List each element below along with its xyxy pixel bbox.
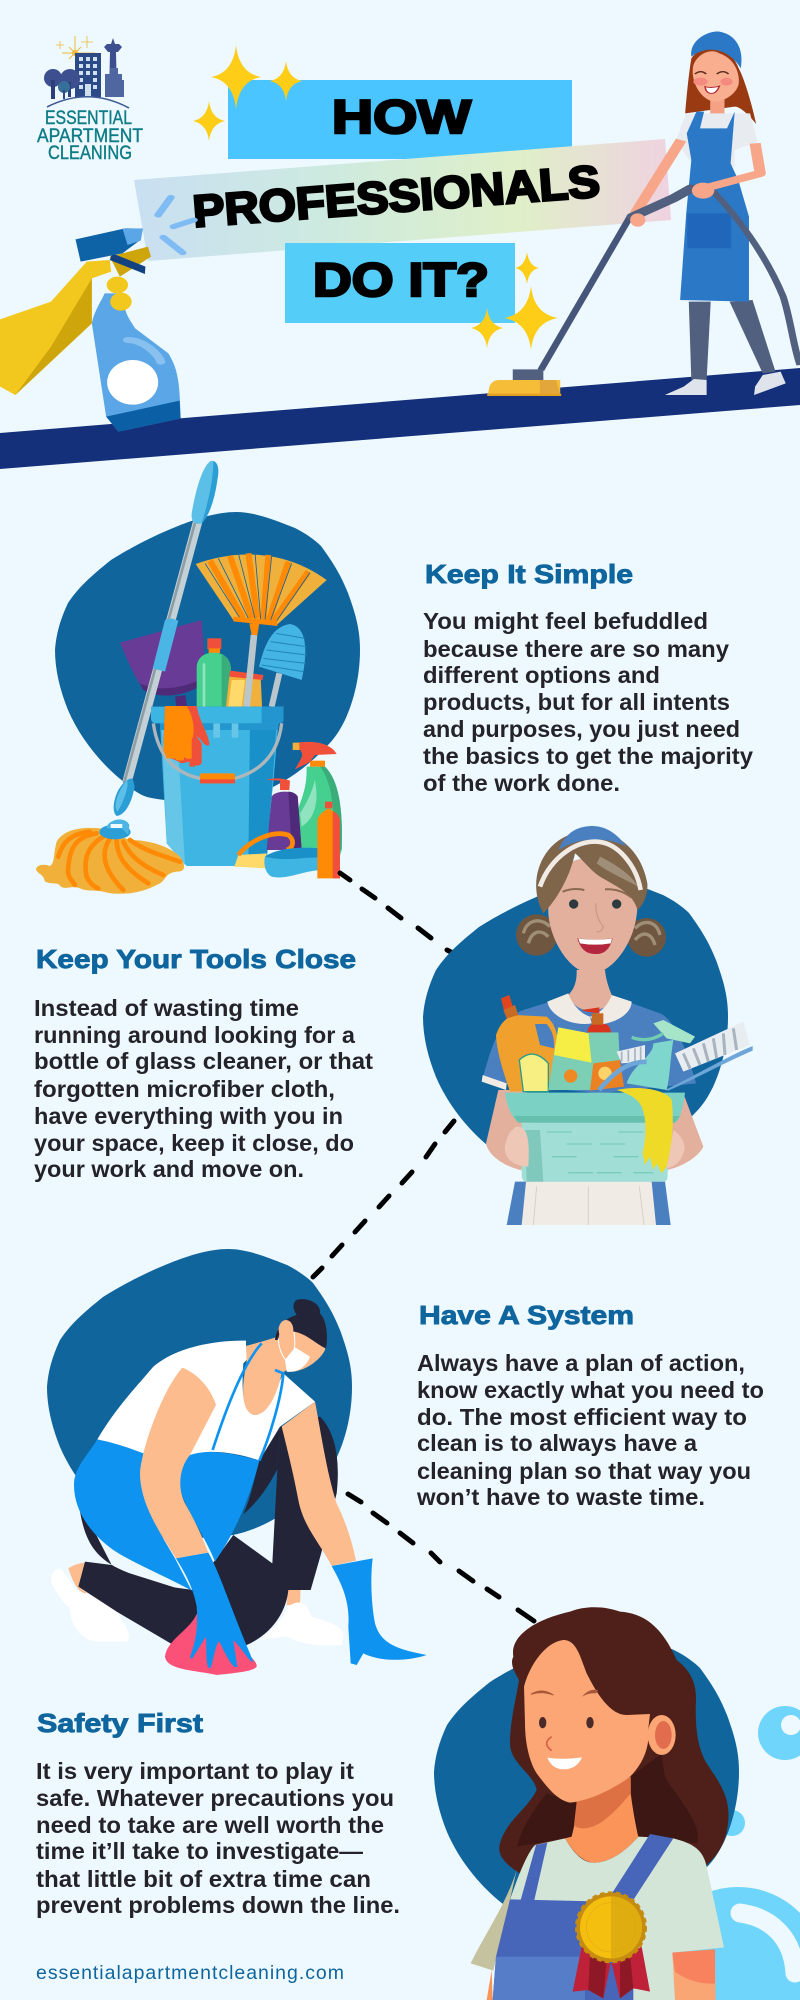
- illustration: cleaner with vacuum: [487, 31, 800, 396]
- floor band: [0, 368, 800, 469]
- title banner: [134, 80, 671, 323]
- text block: keep it simple: and purposes, you just need: [423, 716, 740, 742]
- text block: safety first: safe. Whatever precautions you: [36, 1785, 394, 1811]
- illustration: smiling woman with medal: [434, 1607, 739, 2000]
- text block: keep your tools close: running around looking for a: [34, 1022, 356, 1048]
- text block: keep it simple: Keep It Simple: [425, 559, 633, 589]
- text block: keep it simple: because there are so many: [423, 636, 729, 662]
- logo: Essential Apartment Cleaning: CLEANING: [48, 143, 132, 164]
- text block: keep it simple: of the work done.: [423, 770, 620, 796]
- text block: have a system: won’t have to waste time.: [416, 1484, 705, 1510]
- logo: Essential Apartment Cleaning: [37, 36, 143, 164]
- text block: keep it simple: products, but for all intents: [423, 689, 730, 715]
- text block: keep your tools close: Instead of wasting time: [34, 995, 299, 1021]
- illustration: maid with cleaning basket: [423, 826, 753, 1225]
- logo: Essential Apartment Cleaning: APARTMENT: [37, 126, 143, 147]
- text block: safety first: It is very important to play it: [36, 1758, 354, 1784]
- text block: safety first: that little bit of extra time can: [36, 1866, 371, 1892]
- text block: keep your tools close: have everything with you in: [34, 1103, 343, 1129]
- text block: have a system: Have A System: [419, 1300, 634, 1330]
- title banner: DO IT?: [313, 253, 489, 306]
- text block: have a system: Always have a plan of action,: [417, 1350, 745, 1376]
- text block: keep your tools close: forgotten microfiber cloth,: [34, 1076, 335, 1102]
- text block: keep your tools close: [34, 944, 373, 1182]
- text block: have a system: cleaning plan so that way you: [417, 1458, 751, 1484]
- website url: essentialapartmentcleaning.com: [36, 1962, 344, 1984]
- text block: keep your tools close: Keep Your Tools Close: [36, 944, 356, 974]
- text block: have a system: do. The most efficient way to: [417, 1404, 747, 1430]
- text block: safety first: prevent problems down the line.: [36, 1892, 400, 1918]
- text block: keep your tools close: your work and move on.: [34, 1156, 304, 1182]
- text block: safety first: time it’ll take to investigate—: [36, 1838, 364, 1864]
- text block: have a system: clean is to always have a: [417, 1430, 698, 1456]
- text block: keep your tools close: your space, keep it close, do: [34, 1130, 354, 1156]
- illustration: crouching cleaner with mask and gloves: [47, 1249, 427, 1675]
- title banner: HOW: [332, 90, 472, 143]
- icon: sparkles: [193, 45, 558, 350]
- text block: safety first: [36, 1708, 400, 1918]
- text block: keep it simple: different options and: [423, 662, 660, 688]
- text block: keep it simple: the basics to get the majority: [423, 743, 753, 769]
- logo: Essential Apartment Cleaning: ESSENTIAL: [45, 108, 132, 129]
- text block: safety first: Safety First: [37, 1708, 203, 1738]
- text block: keep your tools close: bottle of glass cleaner, or that: [34, 1048, 373, 1074]
- text block: safety first: need to take are well worth the: [36, 1812, 384, 1838]
- text block: have a system: know exactly what you need to: [417, 1377, 764, 1403]
- text block: have a system: [416, 1300, 764, 1510]
- text block: keep it simple: You might feel befuddled: [423, 608, 708, 634]
- illustration: mop, bucket and supplies: [36, 461, 360, 894]
- illustration: gloved hand with spray bottle: [0, 197, 194, 432]
- decorative bubbles: [651, 1706, 800, 2000]
- dashed connector lines: [313, 873, 534, 1621]
- title banner: PROFESSIONALS: [191, 156, 602, 237]
- text block: keep it simple: [423, 559, 753, 796]
